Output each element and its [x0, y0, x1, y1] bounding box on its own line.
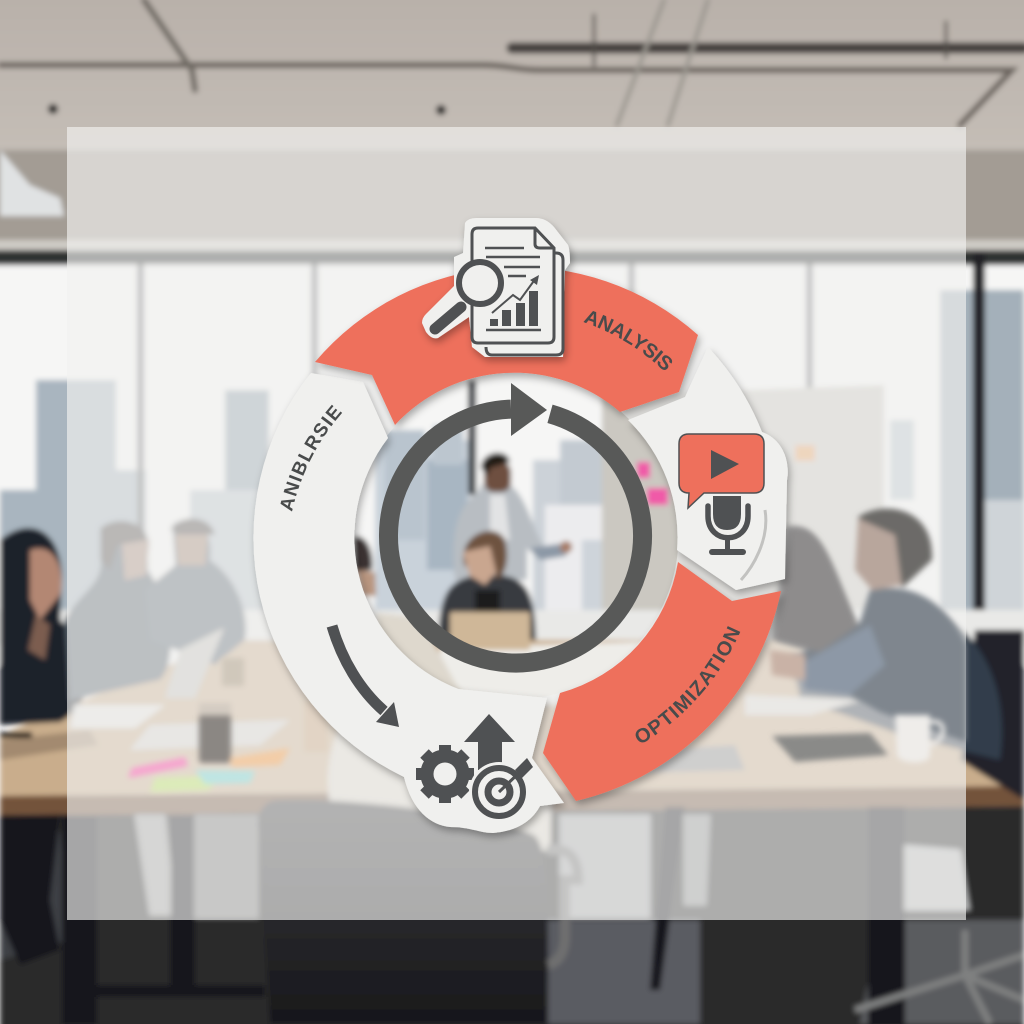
trend arrow [492, 275, 539, 313]
label: ANALYSIS: ANALYSIS [584, 311, 672, 370]
person behind right [770, 525, 855, 655]
back wall [0, 150, 1024, 240]
segment: bottom coral OPTIMIZATION [542, 562, 785, 808]
presenter [454, 485, 572, 580]
table edge [0, 786, 1024, 815]
table legs [62, 815, 97, 1024]
segment: right white with media icon [628, 347, 788, 590]
gear [416, 745, 474, 803]
whiteboard [602, 385, 884, 610]
person far left [0, 528, 88, 725]
window band [0, 240, 1024, 250]
office chair [855, 930, 1024, 1024]
seated person in centre [438, 575, 536, 640]
papers on table [70, 705, 165, 728]
text lines [485, 248, 541, 330]
photo details seen through panel [128, 509, 966, 792]
inner circular arrow [388, 383, 642, 663]
laptop in centre [450, 612, 530, 650]
bar chart [490, 291, 538, 326]
ceiling pipes [0, 0, 1024, 125]
person third [145, 519, 246, 665]
left table items [128, 658, 290, 792]
city buildings [0, 290, 1024, 620]
ceiling light [0, 150, 64, 216]
person across right [790, 590, 1002, 760]
items right table [745, 695, 860, 715]
right table items [772, 715, 943, 762]
front page [472, 228, 554, 343]
icon: video speech bubble [679, 434, 764, 508]
windows [0, 265, 1024, 665]
mullions [137, 250, 985, 625]
open laptop [165, 628, 224, 698]
label: left segment: ANIBLRSIE [280, 404, 342, 512]
table top [0, 640, 1024, 800]
floor [0, 806, 1024, 1024]
translucent white panel with circular window [67, 127, 966, 920]
ceiling [0, 0, 1024, 150]
person second [65, 522, 171, 700]
magnifier [435, 262, 501, 329]
back table rail [0, 610, 1024, 645]
icon: microphone [708, 496, 748, 555]
back page [486, 253, 563, 355]
segment: left white (unreadable label) [251, 373, 568, 840]
fold detail [741, 510, 766, 580]
seated person back, front [328, 613, 550, 850]
man on the right [770, 509, 966, 742]
icon card: report with magnifier [422, 218, 570, 357]
arrow: left curved down [332, 626, 399, 727]
target [469, 758, 533, 822]
cycle diagram [251, 218, 794, 840]
segment: top coral ANALYSIS [315, 270, 704, 430]
front chair [258, 799, 548, 1024]
icon: gear, up arrow and target [416, 714, 533, 822]
label: OPTIMIZATION: OPTIMIZATION [636, 626, 740, 742]
